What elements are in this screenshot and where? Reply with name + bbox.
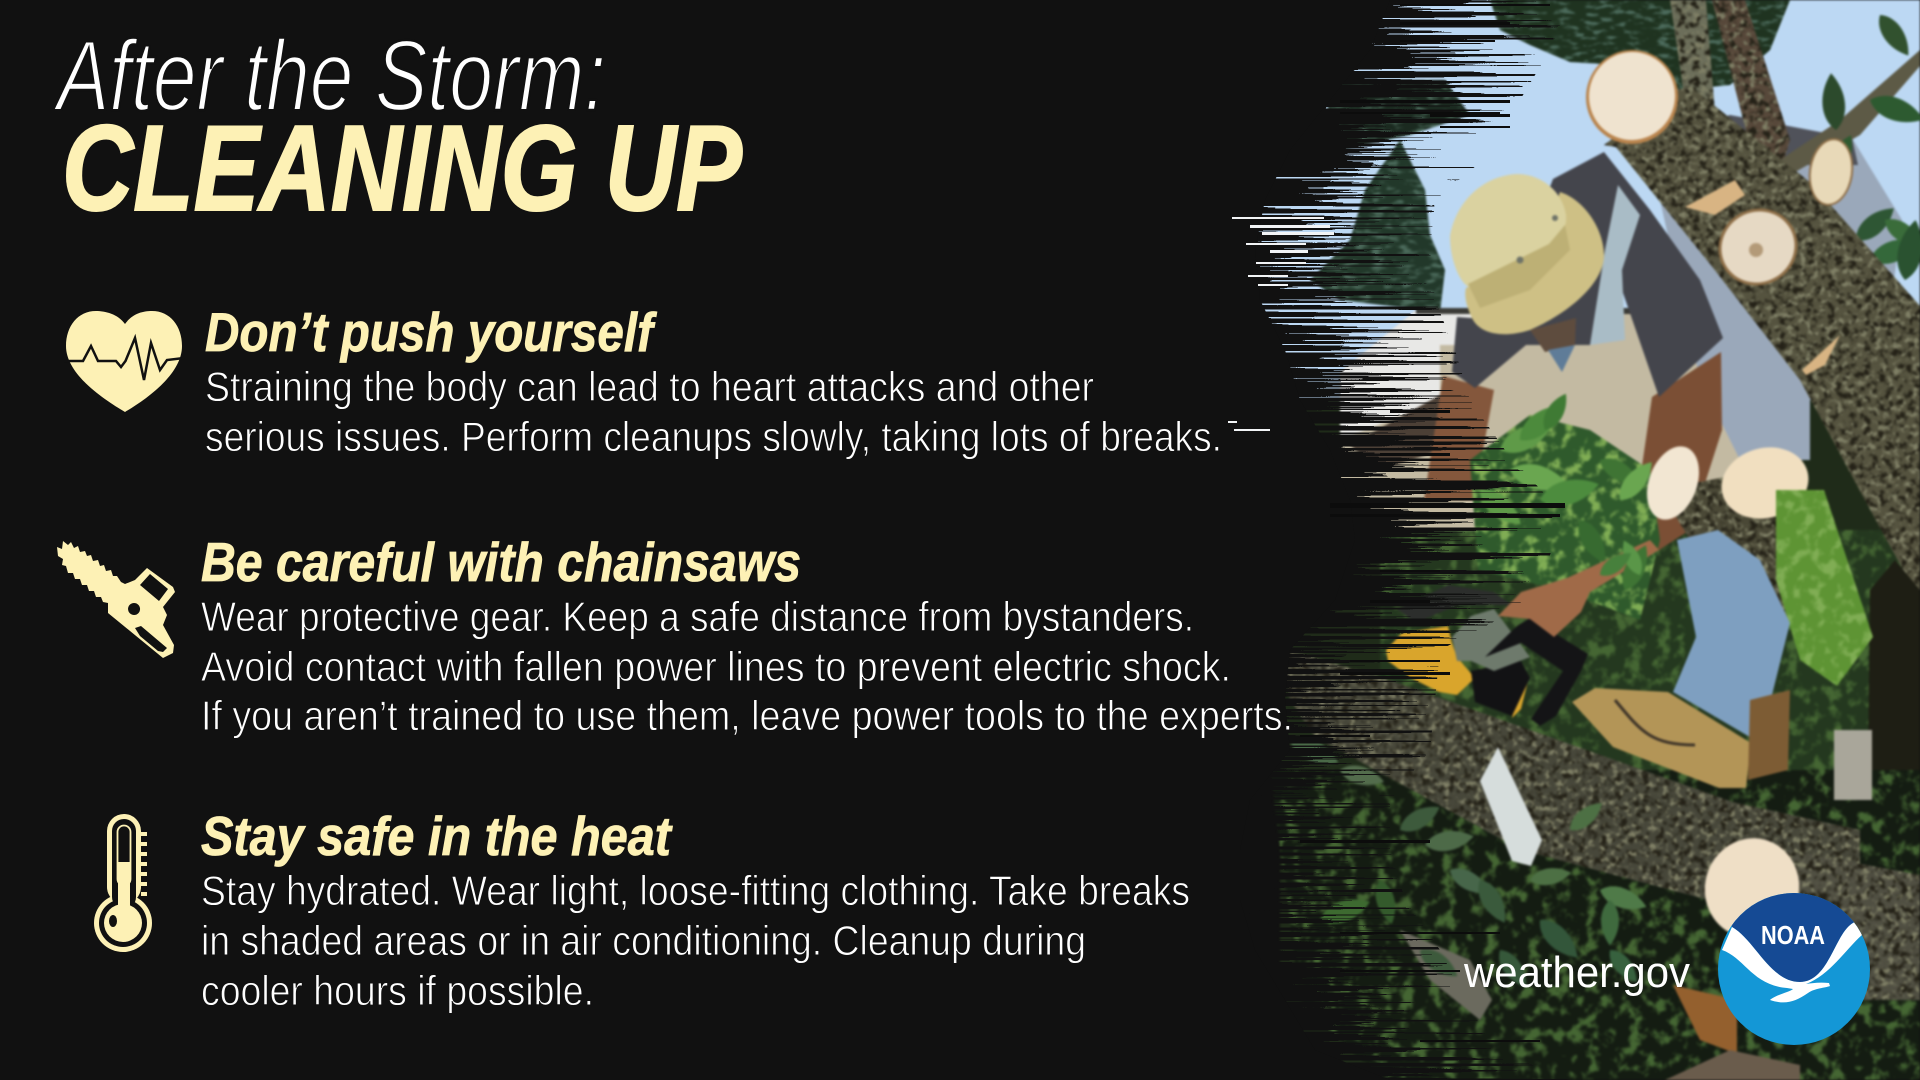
foliage behind chainsaw and right side [1380,530,1920,800]
overall strap [1590,185,1640,345]
body text: cooler hours if possible. [201,967,594,1014]
cut face upper right [1804,135,1858,209]
body text: Wear protective gear. Keep a safe distance from bystanders. [201,593,1194,640]
heading: Be careful with chainsaws [201,531,801,593]
dark foliage base of lower half [1280,400,1920,1080]
panel: stay safe in the heat [94,805,1190,1014]
main upright tree trunk [1604,86,1920,600]
body text: serious issues. Perform cleanups slowly, taking lots of breaks. [205,413,1222,460]
house wall and gable [1340,308,1800,560]
workers overalls, pale blue grey [1660,117,1902,460]
left spruce tree [1310,140,1445,312]
body text [205,363,1222,460]
leaves over forearm [1596,537,1655,594]
sky [1200,0,1920,420]
worker arm, right [1640,352,1722,550]
icon: heart with pulse [64,311,184,412]
second cut branch with faces [1637,438,1817,619]
icon: chainsaw [57,541,175,658]
bucket hat [1450,174,1604,334]
broken branch and wood pieces [1400,930,1800,1080]
heading: Don’t push yourself [205,301,657,363]
title line: After the Storm: After the Storm: [53,20,606,132]
icon: thermometer [94,814,152,952]
jeans [1673,530,1790,743]
body text [201,867,1190,1014]
dark t-shirt [1452,152,1723,397]
upper left spruce branches [1320,80,1470,150]
body text [201,593,1293,739]
title line: Cleaning Up: CLEANING UP [62,100,743,236]
body text: Straining the body can lead to heart attacks and other [205,363,1094,410]
pale streaks at torn edge [1228,217,1334,431]
boot [1572,688,1790,788]
cut branch stub top [1579,43,1685,151]
main fallen log [1278,647,1860,900]
worker arm, left [1424,376,1494,500]
upper tree stems [1670,0,1790,172]
title [53,20,743,236]
upper tree foliage [1490,0,1790,90]
foliage: middle bright leaves [1470,415,1660,620]
torn photo edge: dark brush streaks [0,0,1475,1080]
extra dark streaks over photo [1300,4,1565,1042]
photo: worker cutting a fallen tree with a chainsaw [1200,0,1920,1080]
icon: NOAA logo [1718,893,1870,1045]
solid dark fill under the streaks [0,0,1390,1080]
body text: If you aren’t trained to use them, leave power tools to the experts. [201,692,1293,739]
cut log lower right [1694,828,1920,1000]
dark stem lower right [1868,560,1920,880]
hanging green seed clusters [1776,490,1873,686]
body text: Avoid contact with fallen power lines to prevent electric shock. [201,643,1231,690]
dark shirt back [1714,115,1858,200]
hand and forearm on saw handle [1498,540,1659,637]
chainsaw [1386,585,1588,866]
website label: weather.gov [1463,948,1690,997]
right branches and sky leaves [1780,9,1920,335]
body text: Stay hydrated. Wear light, loose-fitting clothing. Take breaks [201,867,1190,914]
body text: in shaded areas or in air conditioning. Cleanup during [201,917,1086,964]
cut face top [1582,45,1682,147]
bark tear marks [1685,180,1840,375]
leaves in centre [1473,390,1659,568]
panel: don't push yourself [64,301,1222,460]
pale wall behind foliage, lower right [1834,730,1872,800]
heading: Stay safe in the heat [201,805,673,867]
cut face middle [1704,194,1812,300]
lower foliage mass behind log [1270,770,1920,1080]
icon: NOAA logo: NOAA [1761,920,1825,950]
beard and bandana [1530,318,1576,372]
foreground leaves [1286,730,1650,993]
panel: be careful with chainsaws [57,531,1293,739]
